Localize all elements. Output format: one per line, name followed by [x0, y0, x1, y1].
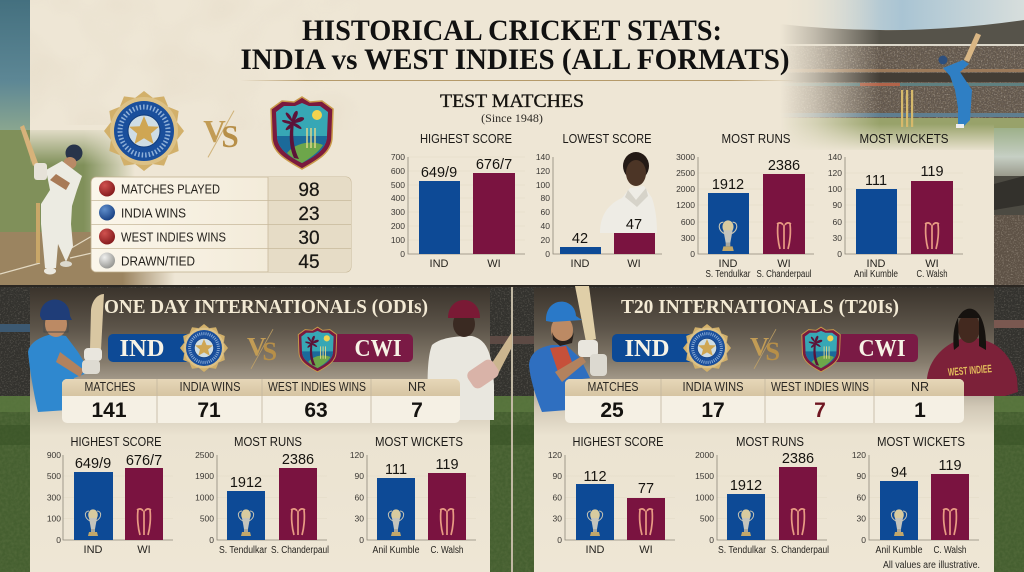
chart: Test highest score: IND	[430, 258, 449, 270]
chart: Test lowest score: 42	[572, 231, 588, 247]
panel: T20 summary table	[565, 379, 964, 423]
chart: ODI highest score: IND	[84, 544, 103, 556]
chart: ODI highest score: 500	[47, 471, 61, 481]
chart: Test highest score: 676/7	[476, 157, 512, 173]
chart: T20 most wickets: 30	[857, 514, 866, 524]
chart: ODI most runs: MOST RUNS	[234, 434, 302, 449]
row: drawn or tied: 45	[298, 252, 320, 273]
chart: T20 most wickets: 120	[852, 450, 866, 460]
chart: Test highest score: 700	[391, 152, 405, 162]
stadium top right	[780, 0, 1024, 152]
chart: T20 most wickets: Anil Kumble	[876, 545, 923, 556]
chart: Test most runs: S. Chanderpaul	[756, 269, 812, 280]
chart: T20 highest score: WI	[639, 544, 653, 556]
team banner: T20 India	[612, 324, 731, 372]
chart: ODI most runs: 2386	[282, 452, 314, 468]
chart: Test lowest score: 100	[536, 180, 550, 190]
chart: Test highest score: 0	[400, 249, 405, 259]
stumps top right	[901, 90, 913, 127]
chart: Test most runs: 2386	[768, 158, 800, 174]
team banner: ODI India	[108, 324, 228, 372]
chart: T20 most runs: 2386	[782, 451, 814, 467]
chart: ODI highest score: 649/9	[75, 456, 111, 472]
bottom stadium background	[0, 286, 1024, 572]
chart: Test most runs: 0	[690, 249, 695, 259]
chart: Test most wickets: 119	[920, 164, 944, 180]
chart: T20 most wickets: C. Walsh	[934, 545, 966, 556]
chart: ODI most runs: S. Chanderpaul	[271, 545, 329, 556]
panel: T20 summary table: WEST INDIES WINS	[771, 380, 869, 394]
chart: Test lowest score: 0	[545, 249, 550, 259]
paper texture	[30, 0, 360, 130]
row: matches played: 98	[298, 180, 320, 201]
row: matches played: MATCHES PLAYED	[121, 182, 220, 196]
chart: Test most wickets: 111	[865, 173, 887, 189]
chart: Test highest score: 400	[391, 193, 405, 203]
batsman in whites	[20, 125, 82, 274]
chart: ODI highest score: WI	[137, 544, 151, 556]
panel: T20 summary table: 17	[701, 399, 725, 422]
chart: T20 most wickets: MOST WICKETS	[877, 434, 965, 449]
chart: ODI highest score: HIGHEST SCORE	[70, 434, 162, 449]
chart: ODI highest score: 100	[47, 514, 61, 524]
icon: ODI versus mark	[247, 329, 277, 369]
chart: T20 highest score: IND	[586, 544, 605, 556]
batsman top right	[938, 33, 981, 128]
chart: Test most runs: 600	[681, 217, 695, 227]
chart: Test lowest score: LOWEST SCORE	[562, 131, 652, 146]
chart: Test highest score: WI	[487, 258, 501, 270]
icon: India cricket badge	[104, 91, 184, 171]
panel: T20 summary table: 1	[914, 399, 926, 422]
chart: Test most runs: MOST RUNS	[722, 131, 791, 146]
heading: Test matches: (Since 1948)	[481, 111, 543, 125]
chart: ODI most runs: 1000	[195, 492, 214, 502]
row: drawn or tied	[99, 252, 320, 273]
chart: T20 highest score: HIGHEST SCORE	[572, 434, 664, 449]
grass and pitch behind batsman	[0, 125, 180, 286]
team banner: T20 West Indies	[802, 327, 918, 372]
chart: T20 most wickets	[852, 434, 979, 556]
chart: Test lowest score: 120	[536, 166, 550, 176]
chart: ODI highest score	[47, 434, 173, 556]
panel: ODI summary table: 63	[304, 399, 328, 422]
chart: Test most runs: 3000	[676, 152, 695, 162]
team banner: ODI West Indies	[298, 327, 413, 372]
chart: Test lowest score: 20	[541, 235, 550, 245]
title	[240, 14, 790, 76]
panel: T20 background	[534, 288, 994, 572]
chart: ODI most runs: 1912	[230, 475, 262, 491]
chart: T20 highest score: 90	[553, 471, 562, 481]
chart: ODI most wickets: Anil Kumble	[372, 545, 420, 556]
chart: Test most runs: 300	[681, 233, 695, 243]
chart: Test lowest score: 80	[541, 193, 550, 203]
right edge stadium strip	[994, 128, 1024, 288]
panel: ODI summary table: 141	[91, 399, 127, 422]
title: INDIA vs WEST INDIES (ALL FORMATS)	[240, 43, 790, 76]
panel: T20 summary table: MATCHES	[588, 380, 638, 394]
chart: Test highest score: 200	[391, 221, 405, 231]
chart: Test highest score: 300	[391, 207, 405, 217]
chart: Test most wickets	[828, 131, 963, 280]
heading: T20 section: T20 INTERNATIONALS (T20Is)	[621, 296, 899, 318]
chart: ODI most wickets: 90	[355, 471, 364, 481]
chart: ODI most runs: 500	[200, 514, 214, 524]
chart: Test most runs	[676, 131, 814, 280]
player: India T20 batsman	[529, 286, 607, 412]
chart: ODI most runs: 1900	[195, 471, 214, 481]
title: HISTORICAL CRICKET STATS:	[302, 14, 722, 47]
chart: T20 most runs: 1000	[695, 492, 714, 502]
chart: ODI most runs: 0	[209, 535, 214, 545]
heading: Test matches: TEST MATCHES	[440, 91, 584, 112]
chart: Test most runs: 2000	[676, 184, 695, 194]
chart: T20 most wickets: 90	[857, 471, 866, 481]
chart: Test lowest score: 40	[541, 221, 550, 231]
chart: ODI most wickets: MOST WICKETS	[375, 434, 463, 449]
chart: Test most runs: IND	[719, 258, 738, 270]
chart: T20 most wickets: 94	[891, 465, 907, 481]
panel: ODI background	[30, 288, 490, 572]
chart: Test lowest score	[536, 131, 662, 270]
chart: T20 highest score: 77	[638, 481, 654, 497]
panel: T20 summary table: NR	[911, 380, 929, 394]
chart: Test most wickets: WI	[925, 258, 939, 270]
row: India wins: 23	[298, 204, 320, 225]
panel: T20 summary table: INDIA WINS	[682, 380, 744, 394]
chart: ODI highest score: 900	[47, 450, 61, 460]
panel: ODI summary table: INDIA WINS	[180, 380, 240, 394]
chart: Test most wickets: Anil Kumble	[854, 269, 898, 280]
chart: T20 most runs: 1500	[695, 471, 714, 481]
chart: Test most wickets: 60	[833, 217, 842, 227]
chart: Test most wickets: 120	[828, 168, 842, 178]
chart: T20 most wickets: 119	[938, 458, 962, 474]
footnote: All values are illustrative.	[883, 560, 980, 571]
icon: West Indies shield	[271, 97, 333, 169]
chart: Test most wickets: 30	[833, 233, 842, 243]
chart: Test most runs: 1200	[676, 200, 695, 210]
chart: Test most wickets: 100	[828, 184, 842, 194]
panel: T20 summary table: 25	[600, 399, 624, 422]
panel: ODI summary table: MATCHES	[84, 380, 136, 394]
row: West Indies wins	[99, 228, 320, 249]
chart: Test lowest score: WI	[627, 258, 641, 270]
chart: Test highest score: 500	[391, 180, 405, 190]
chart: Test most wickets: MOST WICKETS	[860, 131, 949, 146]
chart: ODI highest score: 0	[56, 535, 61, 545]
icon: versus mark	[203, 111, 239, 157]
chart: Test lowest score: 140	[536, 152, 550, 162]
row: India wins: INDIA WINS	[121, 206, 186, 220]
chart: ODI highest score: 676/7	[126, 453, 162, 469]
chart: T20 highest score: 30	[553, 514, 562, 524]
row: West Indies wins: WEST INDIES WINS	[121, 230, 226, 244]
heading: Test matches	[440, 91, 584, 125]
player portrait	[600, 152, 657, 233]
row: matches played	[99, 180, 320, 201]
chart: ODI most wickets: 119	[435, 457, 459, 473]
chart: Test most wickets: 90	[833, 200, 842, 210]
chart: Test most wickets: IND	[867, 258, 886, 270]
chart: T20 highest score	[548, 434, 675, 556]
chart: T20 most runs: 0	[709, 535, 714, 545]
chart: ODI most wickets: 60	[355, 492, 364, 502]
panel: ODI summary table: NR	[408, 380, 426, 394]
row: drawn or tied: DRAWN/TIED	[121, 254, 195, 268]
chart: T20 highest score: 112	[583, 469, 607, 485]
chart: Test lowest score: IND	[571, 258, 590, 270]
panel: ODI summary table: WEST INDIES WINS	[268, 380, 366, 394]
icon: T20 versus mark	[750, 329, 780, 369]
chart: ODI most wickets	[350, 434, 476, 556]
chart: Test most wickets: C. Walsh	[916, 269, 948, 280]
chart: Test highest score: 649/9	[421, 165, 457, 181]
chart: ODI most runs	[195, 434, 329, 556]
chart: T20 most runs: 1912	[730, 478, 762, 494]
chart: ODI most wickets: 111	[385, 462, 407, 478]
player: West Indies T20 batsman	[927, 309, 1018, 396]
chart: Test lowest score: 47	[626, 217, 642, 233]
chart: T20 most runs: MOST RUNS	[736, 434, 804, 449]
player: India ODI batsman	[28, 294, 104, 412]
chart: ODI most wickets: C. Walsh	[430, 545, 464, 556]
chart: T20 most runs: S. Tendulkar	[718, 545, 767, 556]
chart: T20 most runs: S. Chanderpaul	[771, 545, 829, 556]
chart: T20 most runs	[695, 434, 829, 556]
panel: ODI summary table	[62, 379, 460, 423]
chart: ODI highest score: 300	[47, 492, 61, 502]
chart: ODI most wickets: 30	[355, 514, 364, 524]
panel: T20 summary table: 7	[814, 399, 826, 422]
chart: Test most runs: 2500	[676, 168, 695, 178]
chart: Test most runs: 1912	[712, 177, 744, 193]
left sky strip	[0, 0, 30, 135]
chart: ODI most wickets: 120	[350, 450, 364, 460]
panel: ODI summary table: 7	[411, 399, 423, 422]
chart: Test highest score: 600	[391, 166, 405, 176]
team banner: ODI India: IND	[120, 336, 164, 362]
team banner: T20 India: IND	[624, 336, 670, 362]
team banner: ODI West Indies: CWI	[354, 336, 402, 362]
chart: ODI most runs: 2500	[195, 450, 214, 460]
chart: T20 most runs: 2000	[695, 450, 714, 460]
chart: Test highest score: HIGHEST SCORE	[420, 131, 512, 146]
chart: T20 highest score: 60	[553, 492, 562, 502]
chart: Test lowest score: 60	[541, 207, 550, 217]
player: West Indies T20 batsman: WEST INDIEE	[947, 363, 992, 379]
player: West Indies ODI batsman	[428, 300, 512, 420]
team banner: T20 West Indies: CWI	[858, 336, 906, 362]
chart: Test highest score: 100	[391, 235, 405, 245]
panel: ODI summary table: 71	[197, 399, 221, 422]
row: India wins	[99, 204, 320, 225]
chart: T20 most wickets: 60	[857, 492, 866, 502]
chart: ODI most runs: S. Tendulkar	[219, 545, 268, 556]
chart: T20 highest score: 0	[557, 535, 562, 545]
chart: ODI most wickets: 0	[359, 535, 364, 545]
chart: Test most wickets: 0	[837, 249, 842, 259]
chart: Test most runs: S. Tendulkar	[706, 269, 751, 280]
panel: Test summary table	[91, 177, 351, 273]
row: West Indies wins: 30	[298, 228, 320, 249]
heading: ODI section: ONE DAY INTERNATIONALS (ODIs)	[104, 296, 428, 318]
chart: Test most runs: WI	[777, 258, 791, 270]
chart: T20 most wickets: 0	[861, 535, 866, 545]
chart: Test most wickets: 140	[828, 152, 842, 162]
chart: T20 most runs: 500	[700, 514, 714, 524]
chart: Test highest score	[391, 131, 525, 270]
chart: T20 highest score: 120	[548, 450, 562, 460]
